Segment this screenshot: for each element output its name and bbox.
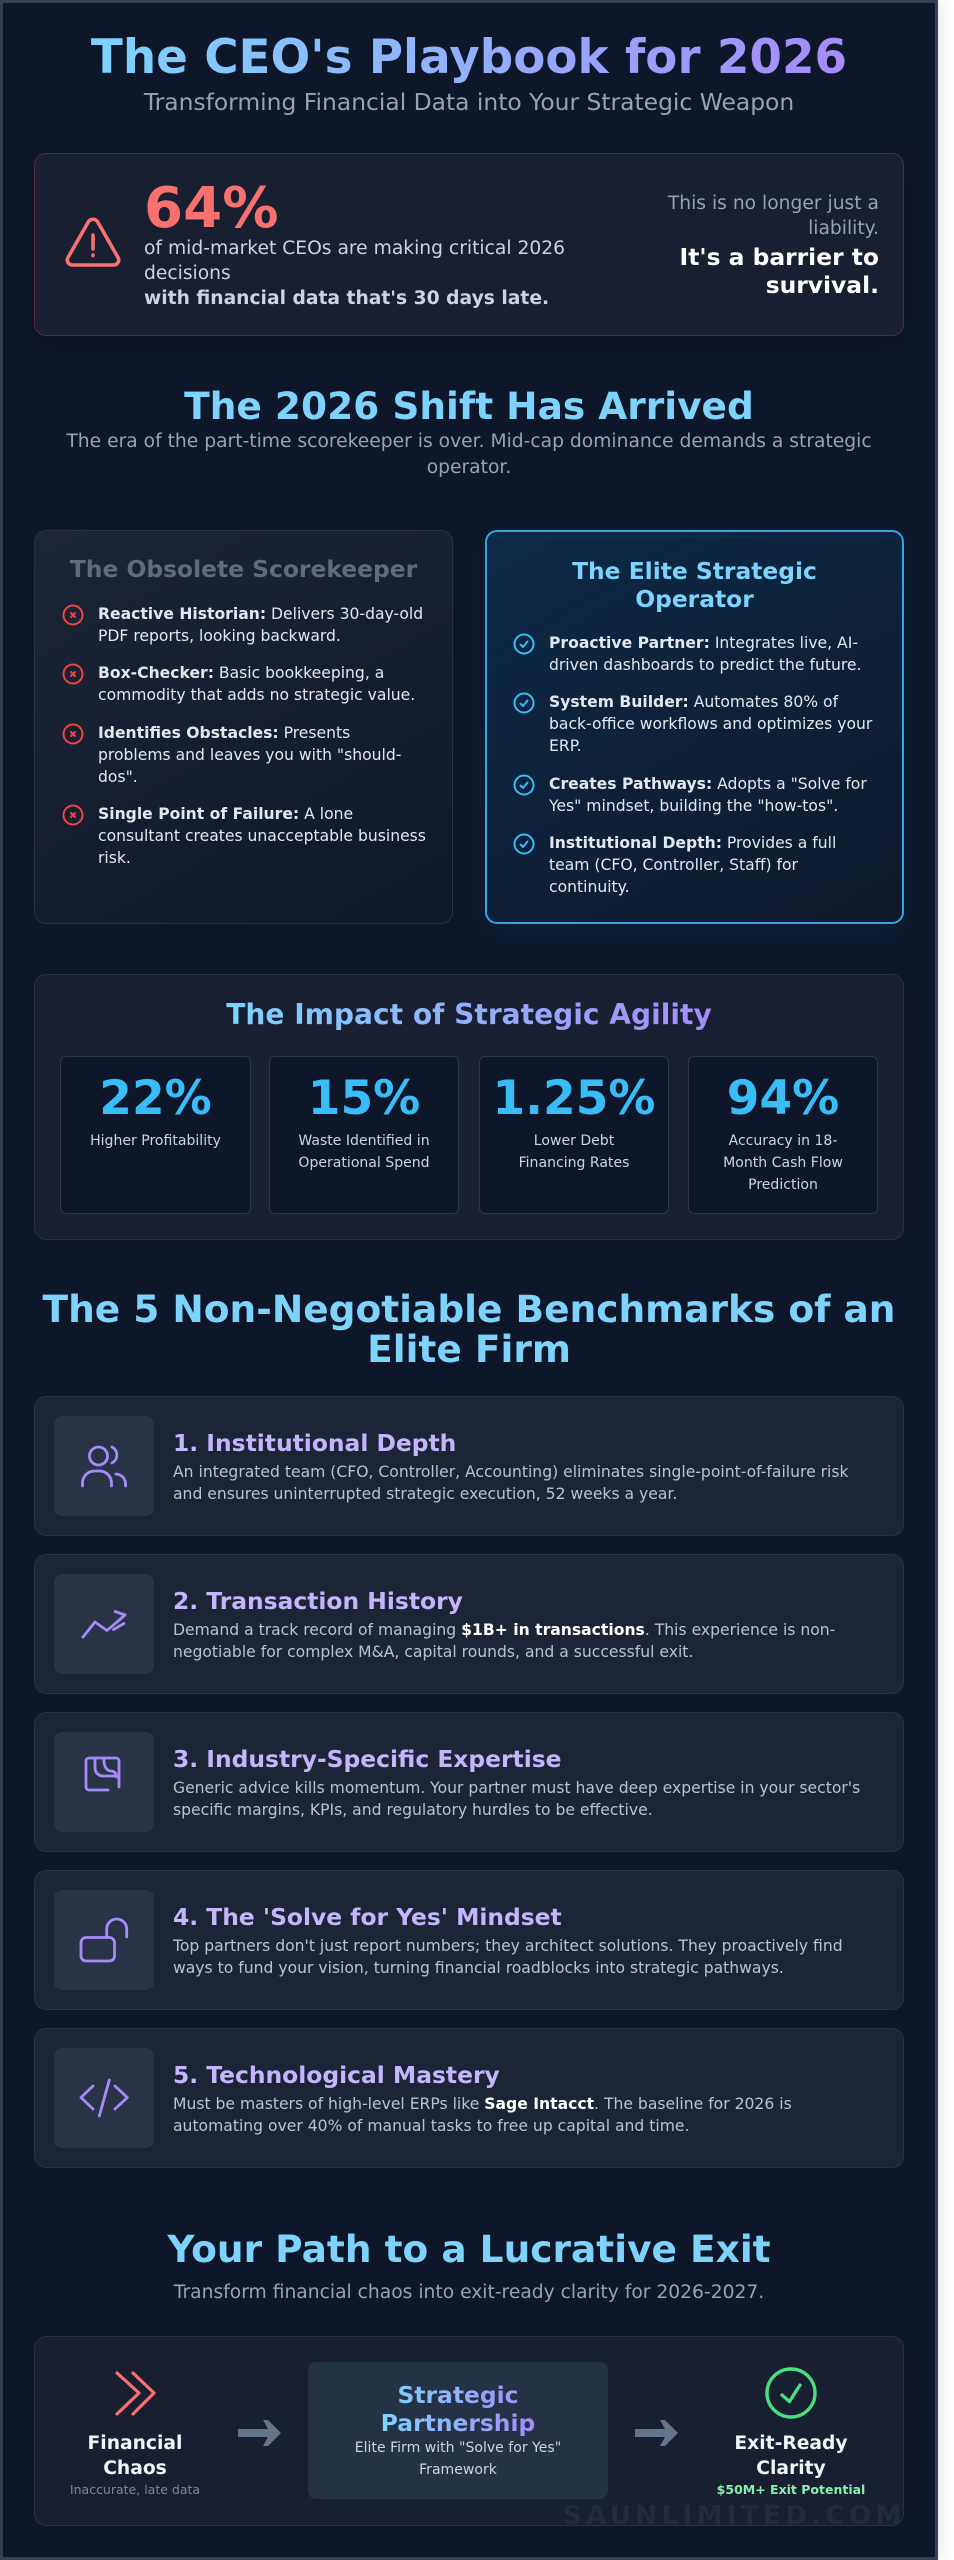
benchmark 1: 1. Institutional Depth bbox=[173, 1429, 456, 1457]
elite item 1: Proactive Partner: Integrates live, AI- bbox=[549, 634, 858, 652]
right callout: It's a barrier to bbox=[680, 243, 879, 271]
subtitle: Transforming Financial Data into Your Strategic Weapon bbox=[144, 88, 794, 116]
benchmark 2: 2. Transaction History bbox=[173, 1587, 463, 1615]
right callout bbox=[668, 193, 879, 299]
stat: 1.25%: 1.25% bbox=[492, 1071, 656, 1126]
benchmark 5 bbox=[34, 2028, 904, 2168]
benchmark 2: Demand a track record of managing $1B+ in transactions. This experience is non- bbox=[173, 1621, 835, 1639]
panel: alert stat bbox=[34, 153, 904, 336]
shift description: The era of the part-time scorekeeper is over. Mid-cap dominance demands a strategic bbox=[66, 431, 872, 452]
partnership heading: Partnership bbox=[381, 2409, 535, 2437]
obsolete item 1 bbox=[98, 605, 423, 645]
benchmark 5: Must be masters of high-level ERPs like Sage Intacct. The baseline for 2026 is bbox=[173, 2095, 792, 2113]
benchmark 4 bbox=[34, 1870, 904, 2010]
arrow 2 bbox=[635, 2420, 678, 2446]
elite item 4: Institutional Depth: Provides a full bbox=[549, 834, 836, 852]
stat: 94%: Prediction bbox=[748, 1177, 818, 1193]
obsolete item 4 bbox=[98, 805, 426, 867]
benchmark 1: and ensures uninterrupted strategic execution, 52 weeks a year. bbox=[173, 1485, 677, 1503]
icon: chaos chevrons bbox=[115, 2371, 156, 2416]
chaos caption: Inaccurate, late data bbox=[70, 2482, 200, 2497]
heading: the shift: The 2026 Shift Has Arrived bbox=[184, 384, 754, 428]
stat: 94%: Accuracy in 18- bbox=[729, 1133, 837, 1149]
panel: impact bbox=[34, 974, 904, 1240]
shift description bbox=[66, 431, 872, 478]
impact heading: The Impact of Strategic Agility bbox=[226, 998, 712, 1031]
obsolete item 4: risk. bbox=[98, 849, 131, 867]
exit description: Transform financial chaos into exit-ready clarity for 2026-2027. bbox=[174, 2282, 764, 2303]
stat description: decisions bbox=[144, 263, 231, 284]
stat description: with financial data that's 30 days late. bbox=[144, 288, 549, 309]
panel: elite strategic operator bbox=[485, 530, 904, 924]
benchmark 4: 4. The 'Solve for Yes' Mindset bbox=[173, 1903, 562, 1931]
stat: 94% bbox=[688, 1056, 878, 1214]
partnership caption bbox=[355, 2440, 561, 2478]
obsolete item 3: problems and leaves you with "should- bbox=[98, 746, 401, 764]
shift description: operator. bbox=[427, 457, 511, 478]
obsolete item 2: commodity that adds no strategic value. bbox=[98, 686, 415, 704]
elite item 4: team (CFO, Controller, Staff) for bbox=[549, 856, 798, 874]
elite item 1: driven dashboards to predict the future. bbox=[549, 656, 861, 674]
title: The CEO's Playbook for 2026 bbox=[91, 31, 847, 85]
elite item 1 bbox=[549, 634, 861, 674]
elite heading: Operator bbox=[635, 585, 754, 613]
obsolete item 3: dos". bbox=[98, 768, 138, 786]
panel: strategic partnership bbox=[308, 2362, 608, 2499]
elite item 2 bbox=[549, 693, 872, 755]
obsolete item 4: Single Point of Failure: A lone bbox=[98, 805, 353, 823]
stat: 15% bbox=[269, 1056, 459, 1214]
stat: 94%: Month Cash Flow bbox=[723, 1155, 843, 1171]
icon: unlock bbox=[54, 1890, 154, 1990]
benchmark 3: specific margins, KPIs, and regulatory hurdles to be effective. bbox=[173, 1801, 653, 1819]
benchmark 3: Generic advice kills momentum. Your partner must have deep expertise in your sector's bbox=[173, 1779, 860, 1797]
partnership caption: Elite Firm with "Solve for Yes" bbox=[355, 2440, 561, 2456]
right callout: liability. bbox=[808, 218, 879, 239]
stat: 1.25%: Lower Debt bbox=[534, 1133, 614, 1149]
elite item 3 bbox=[549, 775, 867, 815]
stat: 1.25% bbox=[479, 1056, 669, 1214]
obsolete item 2: Box-Checker: Basic bookkeeping, a bbox=[98, 664, 384, 682]
step: financial chaos: Financial bbox=[88, 2433, 182, 2454]
benchmark 2: negotiable for complex M&A, capital rounds, and a successful exit. bbox=[173, 1643, 693, 1661]
panel: exit path bbox=[34, 2336, 904, 2526]
obsolete item 3: Identifies Obstacles: Presents bbox=[98, 724, 350, 742]
elite item 2: System Builder: Automates 80% of bbox=[549, 693, 838, 711]
elite heading: The Elite Strategic bbox=[572, 557, 817, 585]
elite item 4: continuity. bbox=[549, 878, 630, 896]
obsolete item 3 bbox=[98, 724, 401, 786]
icon: trend bbox=[54, 1574, 154, 1674]
benchmark 1: An integrated team (CFO, Controller, Accounting) eliminates single-point-of-failure risk bbox=[173, 1463, 849, 1481]
panel: obsolete scorekeeper bbox=[34, 530, 453, 924]
partnership caption: Framework bbox=[419, 2462, 497, 2478]
benchmark 3: 3. Industry-Specific Expertise bbox=[173, 1745, 562, 1773]
stat description: of mid-market CEOs are making critical 2026 bbox=[144, 238, 565, 259]
elite item 3: Yes" mindset, building the "how-tos". bbox=[549, 797, 838, 815]
stat: 22%: Higher Profitability bbox=[90, 1133, 221, 1149]
right callout: survival. bbox=[766, 271, 879, 299]
heading: path to exit: Your Path to a Lucrative Exit bbox=[167, 2227, 771, 2271]
obsolete item 1: PDF reports, looking backward. bbox=[98, 627, 341, 645]
partnership heading bbox=[381, 2381, 535, 2437]
elite heading bbox=[572, 557, 817, 613]
heading: benchmarks: Elite Firm bbox=[367, 1327, 571, 1371]
right callout: This is no longer just a bbox=[668, 193, 879, 214]
heading: benchmarks: The 5 Non-Negotiable Benchmarks of an bbox=[42, 1287, 895, 1331]
benchmark 2 bbox=[34, 1554, 904, 1694]
obsolete item icons bbox=[62, 604, 84, 826]
stat: 94%: 94% bbox=[727, 1071, 839, 1126]
icon: users bbox=[54, 1416, 154, 1516]
icon: clarity check bbox=[765, 2367, 817, 2419]
partnership heading: Strategic bbox=[397, 2381, 519, 2409]
arrow 1 bbox=[238, 2420, 281, 2446]
stat: 15%: Waste Identified in bbox=[298, 1133, 430, 1149]
icon: warning triangle bbox=[66, 218, 120, 267]
step: exit-ready clarity bbox=[734, 2433, 848, 2479]
watermark: SAUNLIMITED.COM bbox=[563, 2501, 906, 2531]
benchmark 5: 5. Technological Mastery bbox=[173, 2061, 500, 2089]
stat: 15%: 15% bbox=[308, 1071, 420, 1126]
elite item icons bbox=[514, 634, 534, 854]
stat: 15%: Operational Spend bbox=[298, 1155, 430, 1171]
elite item 3: Creates Pathways: Adopts a "Solve for bbox=[549, 775, 867, 793]
stat: 22%: 22% bbox=[99, 1071, 212, 1126]
heading: benchmarks bbox=[42, 1287, 895, 1371]
obsolete item 4: consultant creates unacceptable business bbox=[98, 827, 426, 845]
elite item 4 bbox=[549, 834, 836, 896]
clarity caption: $50M+ Exit Potential bbox=[717, 2482, 865, 2497]
benchmark 4: Top partners don't just report numbers; they architect solutions. They proactively find bbox=[173, 1937, 843, 1955]
big stat 64%: 64% bbox=[144, 176, 278, 241]
stat: 22% bbox=[60, 1056, 251, 1214]
benchmark 4: ways to fund your vision, turning financial roadblocks into strategic pathways. bbox=[173, 1959, 784, 1977]
stat: 1.25%: Financing Rates bbox=[519, 1155, 629, 1171]
icon: expertise bbox=[54, 1732, 154, 1832]
step: financial chaos: Chaos bbox=[103, 2458, 167, 2479]
benchmark 1 bbox=[34, 1396, 904, 1536]
elite item 2: back-office workflows and optimizes your bbox=[549, 715, 872, 733]
step: exit-ready clarity: Exit-Ready bbox=[734, 2433, 848, 2454]
benchmark 3 bbox=[34, 1712, 904, 1852]
step: financial chaos bbox=[88, 2433, 182, 2479]
stat description bbox=[144, 238, 565, 309]
obsolete heading: The Obsolete Scorekeeper bbox=[70, 555, 417, 583]
step: exit-ready clarity: Clarity bbox=[756, 2458, 826, 2479]
obsolete item 1: Reactive Historian: Delivers 30-day-old bbox=[98, 605, 423, 623]
elite item 2: ERP. bbox=[549, 737, 582, 755]
icon: code bbox=[54, 2048, 154, 2148]
obsolete item 2 bbox=[98, 664, 415, 704]
benchmark 5: automating over 40% of manual tasks to free up capital and time. bbox=[173, 2117, 689, 2135]
